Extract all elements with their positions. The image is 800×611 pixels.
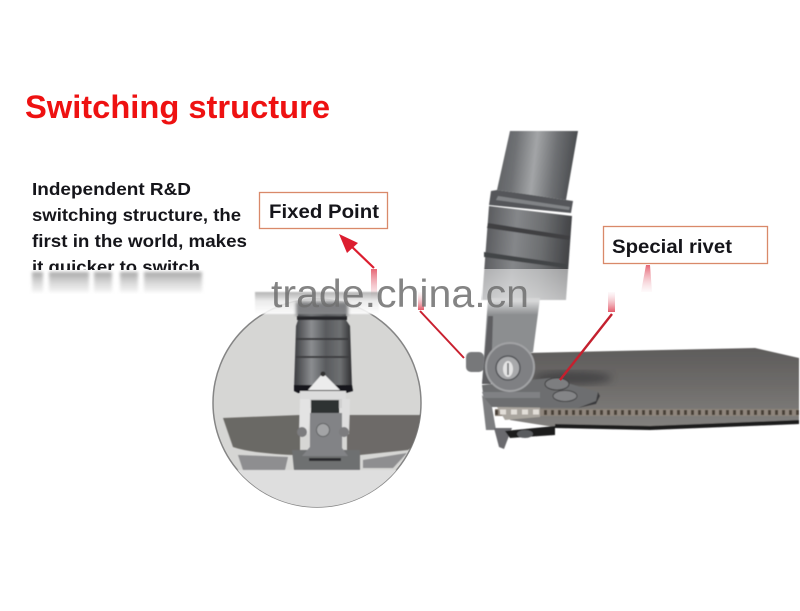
description text block: switching structure, the <box>32 205 241 225</box>
blade shadow <box>532 371 612 385</box>
description text block: Independent R&D <box>32 179 191 199</box>
rivets <box>545 378 569 390</box>
callout: Fixed Point: Fixed Point <box>269 202 380 223</box>
blades <box>223 415 300 455</box>
floor <box>237 470 397 507</box>
arrow: to Special rivet <box>560 265 652 380</box>
knob <box>486 343 534 391</box>
serrated edge <box>495 409 799 416</box>
callout: Fixed Point <box>260 192 388 228</box>
arm <box>482 298 540 384</box>
blurred band across the image <box>255 269 577 316</box>
description text block: first in the world, makes <box>32 231 247 251</box>
description text block: it quicker to switch <box>32 257 200 277</box>
shaft <box>497 131 578 200</box>
dark lower edge <box>555 420 799 430</box>
sleeve <box>482 206 572 300</box>
callout: Special rivet <box>604 226 768 264</box>
title: Switching structure <box>25 89 330 125</box>
callout: Special rivet: Special rivet <box>612 237 733 258</box>
bracket plate <box>482 378 598 408</box>
lower hook <box>494 428 512 449</box>
base <box>292 450 360 470</box>
inset circle: front view of joint <box>205 299 430 515</box>
blade <box>510 348 799 428</box>
yoke <box>299 399 312 434</box>
watermark: trade.china.cn <box>271 273 529 316</box>
sleeve <box>294 300 352 390</box>
collar <box>489 190 573 213</box>
arrow: to Fixed Point <box>339 234 464 358</box>
description text block <box>32 179 247 292</box>
main product photo: shovel joint <box>466 131 799 449</box>
pin <box>466 352 484 372</box>
